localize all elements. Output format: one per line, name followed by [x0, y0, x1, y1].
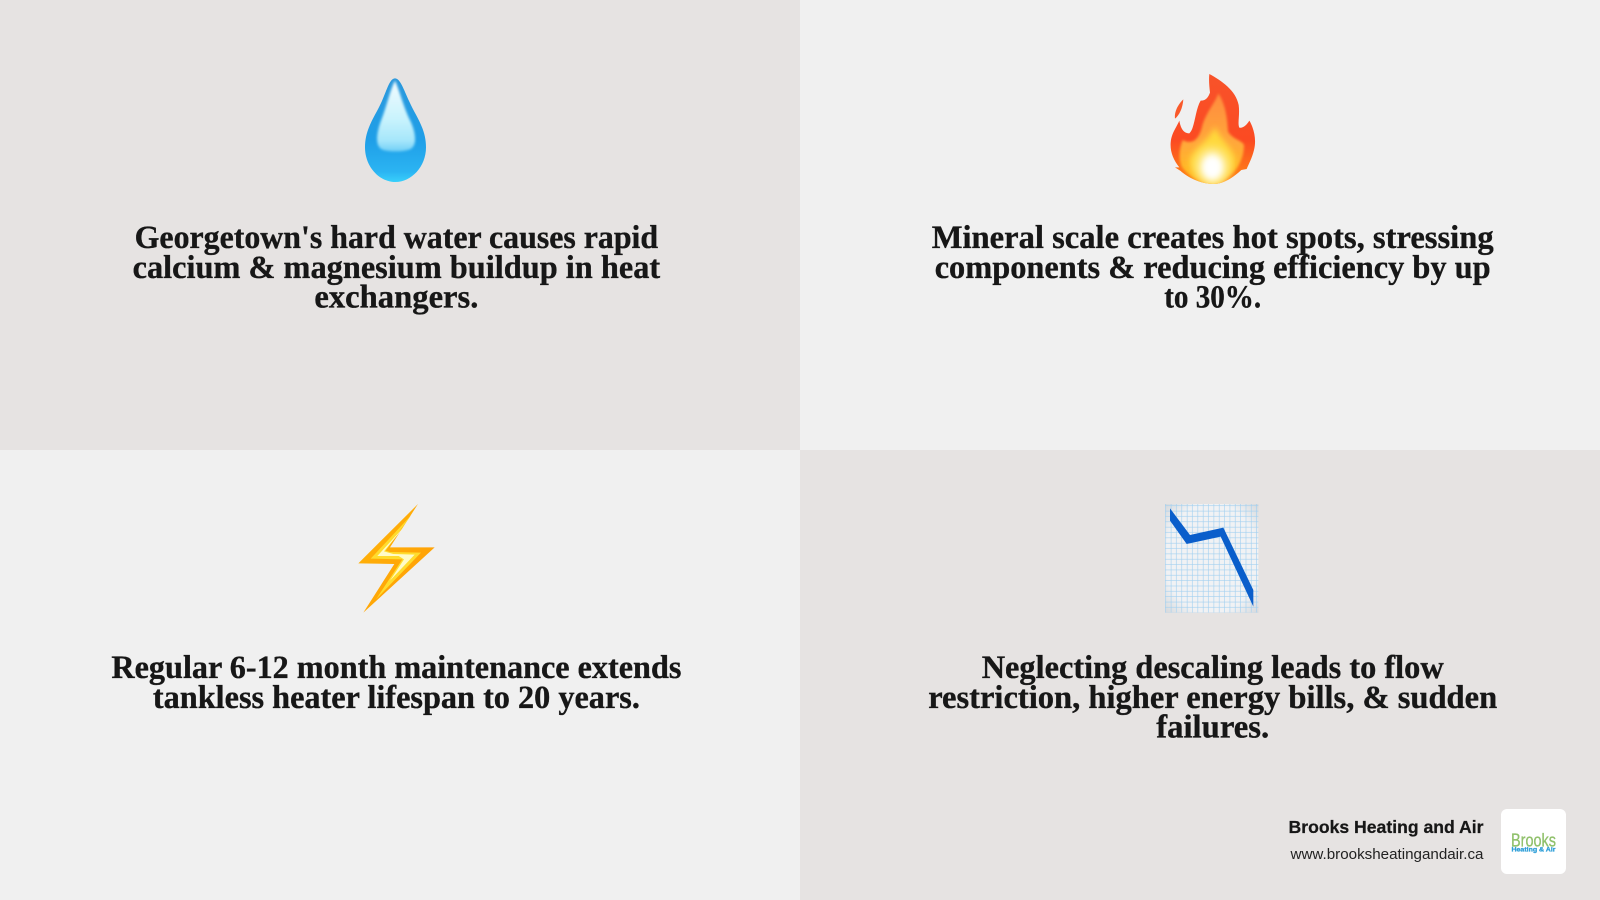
panel: maintenance — [0, 450, 800, 900]
heading: hard water: exchangers. — [314, 280, 478, 316]
heading: hard water: calcium & magnesium buildup in heat — [133, 250, 660, 286]
heading: maintenance: tankless heater lifespan to 20 years. — [153, 680, 640, 716]
heading: hard water: Georgetown's hard water causes rapid — [135, 220, 658, 256]
company name: Brooks Heating and Air — [1288, 817, 1484, 837]
logo: Heating & Air — [1512, 846, 1556, 854]
heading: neglect: failures. — [1156, 710, 1269, 746]
panel: hard water — [0, 0, 800, 450]
heading: mineral scale: Mineral scale creates hot spots, stressing — [932, 220, 1494, 256]
icon: lightning bolt — [358, 504, 435, 613]
icon: fire — [1171, 74, 1255, 185]
heading: mineral scale: components & reducing efficiency by up — [935, 250, 1491, 286]
logo: Brooks — [1511, 830, 1556, 850]
icon: water drop — [365, 78, 426, 182]
icon: declining chart — [1165, 504, 1258, 613]
footer: brand — [1288, 809, 1566, 874]
website: www.brooksheatingandair.ca — [1289, 847, 1484, 863]
logo — [1501, 809, 1566, 874]
heading: neglect: Neglecting descaling leads to flow — [982, 650, 1444, 686]
heading: neglect: restriction, higher energy bills, & sudden — [928, 680, 1497, 716]
panel: neglect — [800, 450, 1600, 900]
heading: maintenance: Regular 6-12 month maintenance extends — [111, 650, 682, 686]
panel: mineral scale — [932, 74, 1494, 308]
heading: mineral scale: to 30%. — [1164, 280, 1261, 316]
